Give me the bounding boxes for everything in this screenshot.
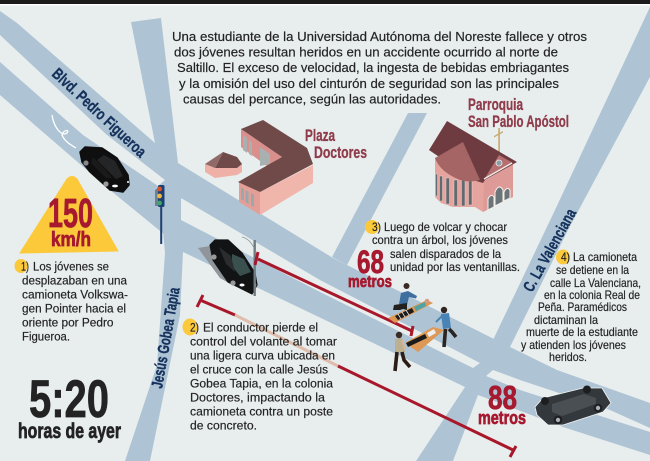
step 3 text: contra un árbol, los jóvenes — [372, 233, 508, 247]
street label: Blvd. Pedro Figueroa: Blvd. Pedro Figueroa — [48, 65, 149, 161]
icon: crashed car and pole — [198, 237, 257, 296]
speed value: 150 — [48, 190, 93, 236]
median west — [0, 35, 165, 186]
building: Plaza Doctores — [205, 120, 313, 215]
intro text: y la omisión del uso del cinturón de seguridad son las principales — [179, 76, 560, 91]
heading: Parroquia San Pablo Apóstol: Parroquia — [468, 95, 523, 114]
time callout: 5:20 — [29, 370, 109, 429]
step 3 text — [365, 220, 520, 274]
step 2 text: El conductor pierde el — [203, 320, 318, 334]
step 2 text: 2) — [190, 320, 199, 334]
arrow: 88 metros — [197, 295, 516, 457]
step 3 text: salen disparados de la — [390, 247, 501, 261]
median centre — [181, 198, 480, 368]
people: paramedics with stretchers — [388, 283, 456, 371]
standing paramedic front — [395, 332, 410, 371]
step 4 text: dictaminan la — [534, 314, 599, 327]
kneeling paramedic — [393, 283, 417, 310]
time callout — [18, 370, 121, 443]
intro text: Saltillo. El exceso de velocidad, la ingesta de bebidas embriagantes — [177, 60, 569, 75]
stretcher two — [405, 327, 444, 352]
intro text: causas del percance, según las autoridades. — [183, 92, 441, 106]
icon: black car — [80, 147, 129, 192]
standing paramedic back — [436, 307, 456, 347]
intro text — [172, 29, 588, 106]
speed unit: km/h — [51, 229, 91, 251]
gazebo — [205, 152, 242, 178]
step 2 text: una ligera curva ubicada en — [190, 348, 335, 362]
step 4 text: heridos. — [549, 351, 587, 364]
step 1 text: camioneta Volkswa- — [22, 288, 128, 302]
step 3 text: Luego de volcar y chocar — [384, 220, 507, 234]
heading: Plaza Doctores: Plaza — [305, 126, 335, 145]
arrow: 68 metros — [255, 252, 413, 336]
step 4 text: La camioneta — [573, 251, 638, 264]
step 2 text: camioneta contra un poste — [190, 404, 333, 418]
road: Jesús Gobea Tapia — [125, 18, 183, 461]
icon: speed warning triangle — [20, 176, 118, 253]
distance label: 88 metros: metros — [478, 408, 526, 428]
step 1 text: 1) — [21, 260, 29, 274]
step 1 text: oriente por Pedro — [22, 316, 114, 330]
distance label: 88 metros: 88 — [488, 379, 517, 416]
stretcher one — [388, 299, 433, 323]
intro text: dos jóvenes resultan heridos en un accidente ocurrido al norte de — [174, 44, 558, 60]
heading: Parroquia San Pablo Apóstol: San Pablo Apóstol — [468, 112, 569, 131]
step 3 text: unidad por las ventanillas. — [390, 260, 520, 274]
icon: overturned car — [535, 386, 611, 425]
distance label: 68 metros: metros — [348, 272, 392, 291]
step 2 text — [182, 318, 337, 432]
icon: skid mark — [52, 115, 76, 148]
step 2 text: Gobea Tapia, en la colonia — [190, 376, 333, 390]
step 1 text — [14, 259, 128, 344]
distance label: 68 metros — [348, 244, 392, 291]
step 4 text: calle La Valenciana, — [550, 277, 641, 290]
street label: Jesús Gobea Tapia: Jesús Gobea Tapia — [149, 286, 184, 390]
step 2 text: control del volante al tomar — [190, 334, 337, 348]
step 4 text: en la colonia Real de — [544, 289, 640, 302]
road: side street — [332, 113, 427, 265]
heading: Plaza Doctores — [305, 126, 367, 162]
step 1 text: desplazaban en una — [22, 274, 127, 288]
street label: C. La Valenciana: C. La Valenciana — [521, 206, 580, 295]
step 1 text: gen Pointer hacia el — [22, 302, 126, 316]
road: C. La Valenciana — [416, 7, 650, 461]
step 2 text: el cruce con la calle Jesús — [190, 362, 328, 376]
building: church — [429, 121, 517, 212]
distance label: 68 metros: 68 — [357, 244, 384, 280]
step 4 text: se detiene en la — [556, 264, 629, 277]
time callout: horas de ayer — [18, 420, 121, 443]
step 1 text: Los jóvenes se — [33, 260, 109, 274]
step 4 text: 4) — [561, 251, 570, 264]
heading: Parroquia San Pablo Apóstol — [468, 95, 569, 131]
step 3 text: 3) — [372, 220, 381, 234]
step 1 text: Figueroa. — [22, 330, 70, 344]
step 4 text: Peña. Paramédicos — [538, 301, 627, 314]
step 4 text — [521, 250, 641, 364]
intro text: Una estudiante de la Universidad Autónoma del Noreste fallece y otros — [172, 29, 588, 44]
step 4 text: muerte de la estudiante — [526, 326, 638, 339]
step 4 text: y atienden los jóvenes — [521, 339, 626, 352]
cross — [494, 128, 503, 158]
median east — [486, 370, 650, 432]
step 2 text: Doctores, impactando la — [190, 390, 325, 404]
heading: Plaza Doctores: Doctores — [314, 143, 367, 162]
distance label: 88 metros — [478, 379, 526, 428]
icon: traffic light — [155, 185, 164, 244]
step 2 text: de concreto. — [190, 418, 257, 432]
pole — [242, 237, 256, 296]
